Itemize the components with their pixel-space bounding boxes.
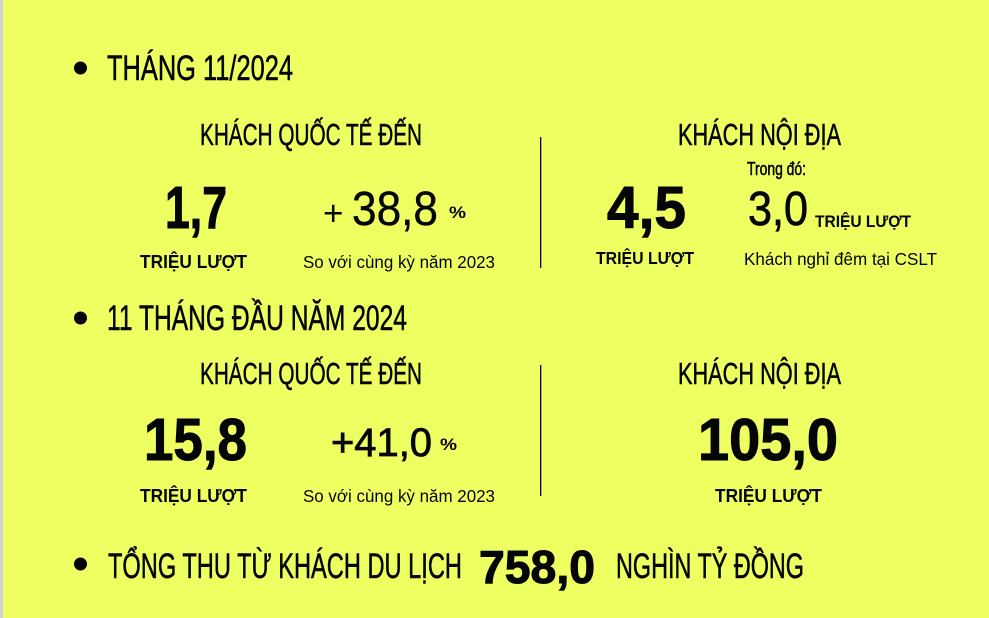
- total revenue line: [74, 541, 804, 593]
- growth figure: +38,8 %: +: [323, 194, 343, 233]
- figure: 105,0 million: 105,0: [698, 407, 838, 473]
- figure: 3,0 million: 3,0: [748, 183, 808, 236]
- heading: international visitors: KHÁCH QUỐC TẾ ĐẾN: [200, 116, 422, 152]
- figure: 758,0: 758,0: [479, 541, 595, 593]
- panel: international visitors 11 months: [140, 355, 495, 506]
- unit label: TRIỆU LƯỢT: [596, 247, 694, 268]
- growth figure: +38,8 %: 38,8: [352, 183, 438, 236]
- unit label: TRIỆU LƯỢT: [140, 251, 248, 272]
- unit label: TRIỆU LƯỢT: [140, 485, 248, 506]
- heading: international visitors: KHÁCH QUỐC TẾ ĐẾN: [200, 355, 422, 391]
- section heading: first 11 months of 2024: [74, 298, 407, 338]
- heading: domestic visitors: KHÁCH NỘI ĐỊA: [678, 117, 841, 152]
- note: overnight guests: Khách nghỉ đêm tại CSLT: [744, 249, 937, 269]
- growth figure: +41,0 %: %: [440, 436, 457, 454]
- panel: domestic visitors November: [596, 117, 937, 269]
- figure: 1,7 million: 1,7: [165, 175, 227, 241]
- panel: international visitors November: [140, 116, 495, 272]
- comparison note: So với cùng kỳ năm 2023: [303, 252, 495, 272]
- label: of which: Trong đó:: [747, 159, 806, 179]
- unit label: TRIỆU LƯỢT: [815, 212, 912, 231]
- growth figure: +41,0 %: +41,0: [331, 421, 432, 465]
- label: total revenue: TỔNG THU TỪ KHÁCH DU LỊCH: [108, 546, 462, 586]
- unit label: TRIỆU LƯỢT: [715, 485, 823, 506]
- divider: [540, 137, 541, 268]
- section heading: November 2024: THÁNG 11/2024: [107, 49, 293, 88]
- section heading: November 2024: [74, 49, 293, 88]
- panel: domestic visitors 11 months: [678, 356, 841, 506]
- section heading: first 11 months of 2024: 11 THÁNG ĐẦU NĂM 2024: [107, 298, 407, 338]
- figure: 15,8 million: 15,8: [144, 407, 247, 473]
- figure: 4,5 million: 4,5: [607, 175, 686, 241]
- growth figure: +38,8 %: [323, 183, 466, 236]
- comparison note: So với cùng kỳ năm 2023: [303, 486, 495, 506]
- unit: thousand billion dong: NGHÌN TỶ ĐỒNG: [616, 546, 804, 586]
- divider: [540, 365, 541, 496]
- heading: domestic visitors: KHÁCH NỘI ĐỊA: [678, 356, 841, 391]
- growth figure: +38,8 %: %: [449, 204, 466, 222]
